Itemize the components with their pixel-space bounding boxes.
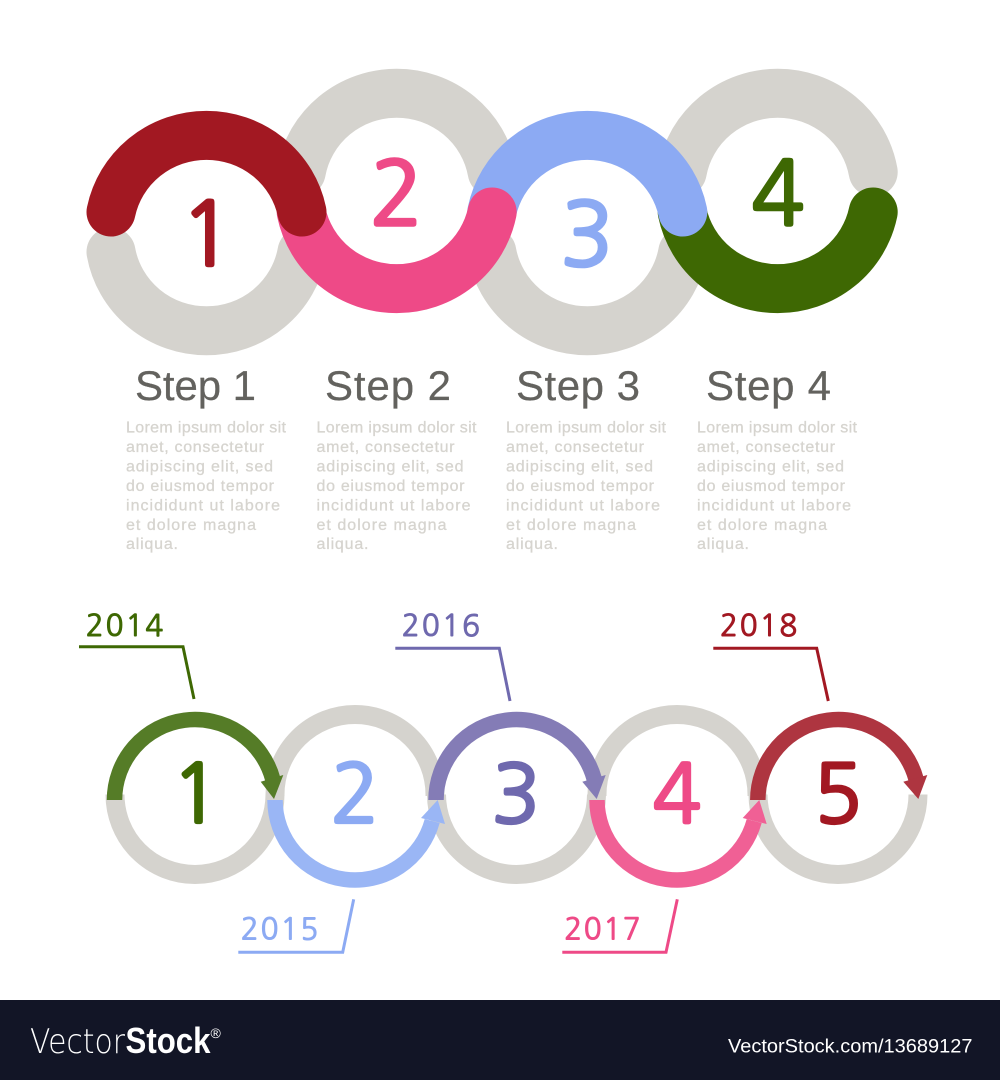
grey background rings: [115, 715, 918, 875]
body text: step 1: et dolore magna: [126, 517, 256, 534]
number 1: 1: [181, 191, 233, 278]
callout: 2015: 2015: [241, 916, 318, 944]
arc: step 1 red: [111, 135, 302, 212]
text block: step 4: [697, 362, 858, 553]
body text: step 2: adipiscing elit, sed: [316, 458, 464, 476]
arc: step 3 blue: [492, 135, 683, 212]
body text: step 1: [126, 420, 287, 553]
text block: step 2: [316, 362, 477, 553]
footer logo: Vector: [30, 1022, 125, 1062]
arrow: 2015 blue: [275, 800, 445, 880]
number 3: 3: [561, 192, 613, 278]
body text: step 2: Lorem ipsum dolor sit: [316, 420, 477, 437]
heading: step 4: Step 4: [706, 362, 831, 409]
heading: step 2: Step 2: [325, 362, 451, 409]
panel: four step chain: [111, 93, 873, 331]
body text: step 1: amet, consectetur: [126, 439, 265, 456]
body text: step 3: Lorem ipsum dolor sit: [506, 420, 667, 437]
callout: 2017: [562, 899, 677, 952]
body text: step 2: do eiusmod tempor: [316, 478, 465, 495]
timeline number 4: 4: [653, 754, 701, 834]
callout: 2018: [713, 612, 828, 701]
grey background arcs: [111, 93, 873, 331]
body text: step 1: adipiscing elit, sed: [126, 458, 273, 476]
number 4: 4: [752, 150, 804, 238]
body text: step 1: Lorem ipsum dolor sit: [126, 420, 287, 437]
body text: step 4: aliqua.: [697, 536, 749, 553]
arrow: 2017 pink: [597, 800, 767, 880]
panel: five year timeline: [114, 715, 927, 880]
body text: step 2: aliqua.: [316, 536, 368, 553]
timeline number 3: 3: [492, 754, 540, 834]
body text: step 3: adipiscing elit, sed: [506, 458, 653, 476]
body text: step 3: aliqua.: [506, 536, 558, 553]
body text: step 3: incididunt ut labore: [506, 498, 660, 514]
callout: 2016: [395, 612, 510, 701]
number 2: 2: [370, 150, 423, 238]
callout: 2015: [238, 899, 354, 952]
footer logo: [30, 1020, 222, 1062]
body text: step 4: Lorem ipsum dolor sit: [697, 420, 858, 437]
timeline number 1: 1: [172, 754, 220, 834]
body text: step 4: do eiusmod tempor: [697, 478, 846, 495]
body text: step 4: et dolore magna: [697, 517, 827, 534]
heading: step 3: Step 3: [516, 362, 640, 409]
arc: step 4 green: [682, 212, 873, 289]
arc: step 2 pink: [301, 212, 492, 289]
callout: 2018: 2018: [720, 612, 797, 641]
callout: 2014: 2014: [86, 612, 163, 641]
footer image id: VectorStock.com/13689127: [728, 1037, 972, 1058]
heading: step 1: Step 1: [135, 362, 256, 409]
body text: step 4: amet, consectetur: [697, 439, 836, 456]
callout: 2014: [79, 612, 194, 699]
footer logo: ®: [210, 1025, 222, 1041]
body text: step 3: [506, 420, 667, 553]
text block: step 3: [506, 362, 667, 553]
body text: step 3: amet, consectetur: [506, 439, 645, 456]
callout: 2016: 2016: [402, 612, 480, 641]
body text: step 2: incididunt ut labore: [316, 498, 471, 514]
body text: step 4: [697, 420, 858, 553]
body text: step 1: aliqua.: [126, 536, 178, 553]
body text: step 4: adipiscing elit, sed: [697, 458, 844, 476]
body text: step 2: amet, consectetur: [316, 439, 455, 456]
body text: step 2: et dolore magna: [316, 517, 447, 534]
callout: 2017: 2017: [564, 916, 641, 944]
timeline number 2: 2: [331, 754, 379, 834]
body text: step 3: et dolore magna: [506, 517, 636, 534]
arrow: 2014 green: [114, 720, 283, 800]
body text: step 3: do eiusmod tempor: [506, 478, 655, 495]
arrow: 2016 purple: [436, 720, 606, 800]
footer bar: [0, 1000, 1000, 1080]
body text: step 4: incididunt ut labore: [697, 498, 851, 514]
body text: step 2: [316, 420, 477, 553]
text block: step 1: [126, 362, 287, 553]
body text: step 1: incididunt ut labore: [126, 498, 280, 514]
timeline number 5: 5: [814, 754, 862, 834]
arrow: 2018 red: [758, 720, 927, 800]
body text: step 1: do eiusmod tempor: [126, 478, 275, 495]
footer logo: Stock: [126, 1020, 211, 1061]
